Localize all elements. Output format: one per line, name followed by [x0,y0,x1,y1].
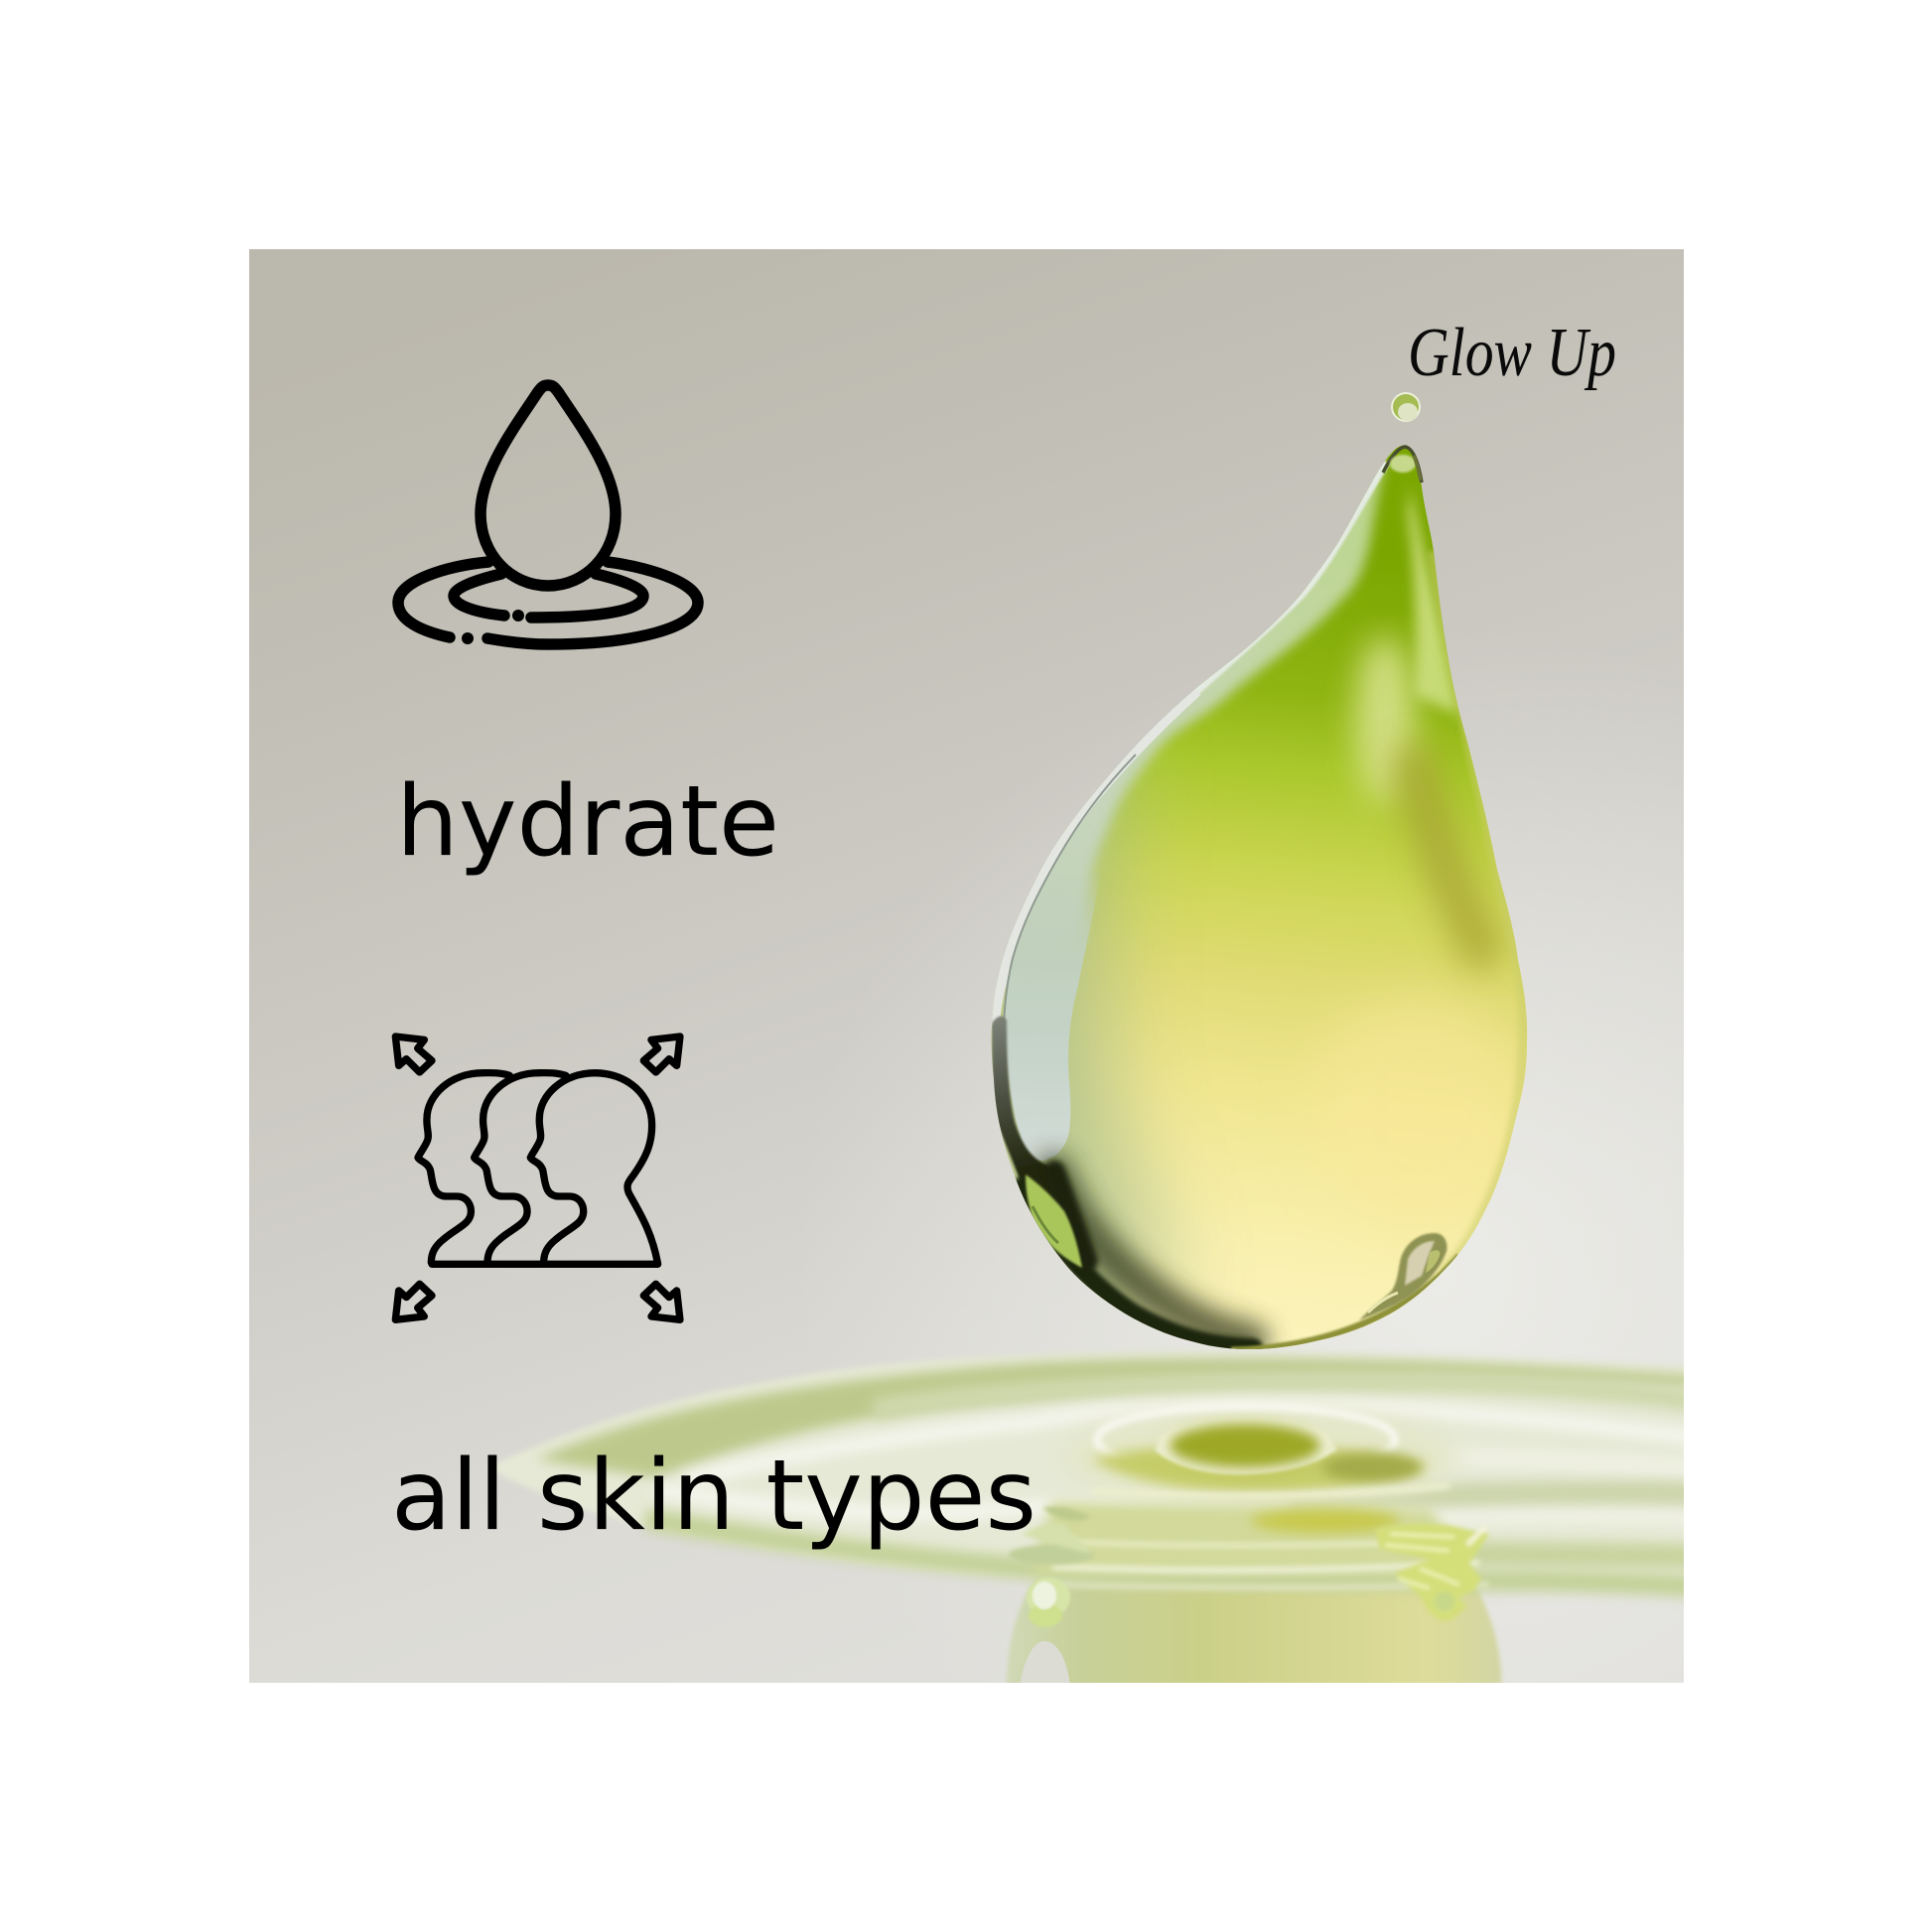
outer white rim [992,689,1195,1026]
illustration: small droplet [1391,392,1421,422]
panel: background [249,249,1684,1683]
right turbulence [1375,1524,1489,1621]
inner rim line [1004,755,1136,1025]
left reflected bubbles [1027,1578,1070,1627]
central eye [1062,1406,1459,1507]
right olive shade [1415,764,1481,948]
pale glow near neck [1355,635,1415,804]
lower hard highlight blob [1006,874,1100,1161]
left sage shading [991,762,1203,1312]
heading: all skin types: all skin types [391,1440,1036,1553]
dark lower-left rim [1023,1186,1253,1348]
soft lower-left shadow [1054,1172,1251,1340]
facet lower left [1026,1174,1082,1268]
photo: oil pool with ripples [488,1352,1698,1698]
icon: heads with arrows [395,1036,680,1319]
right rim [1434,551,1524,1271]
lower swell [1033,1501,1489,1587]
drop reflection [1005,1579,1503,1683]
tip lens [1383,447,1422,483]
icon: water drop with ripples [398,385,698,644]
ripple bands [536,1358,1698,1587]
facet lower right [1359,1233,1448,1320]
left dark sliver [992,1017,1058,1231]
neck lighter right side [1408,486,1459,715]
lower right rim line [1231,1256,1459,1350]
brand: Glow Up: Glow Up [1408,315,1616,391]
upper pale rim [1136,462,1386,746]
heading: hydrate: hydrate [396,765,779,879]
illustration: large oil drop [991,445,1527,1349]
pool surface [496,1354,1684,1551]
soft highlight band [993,459,1385,983]
left turbulence [1009,1507,1094,1565]
warm core [1343,991,1504,1098]
